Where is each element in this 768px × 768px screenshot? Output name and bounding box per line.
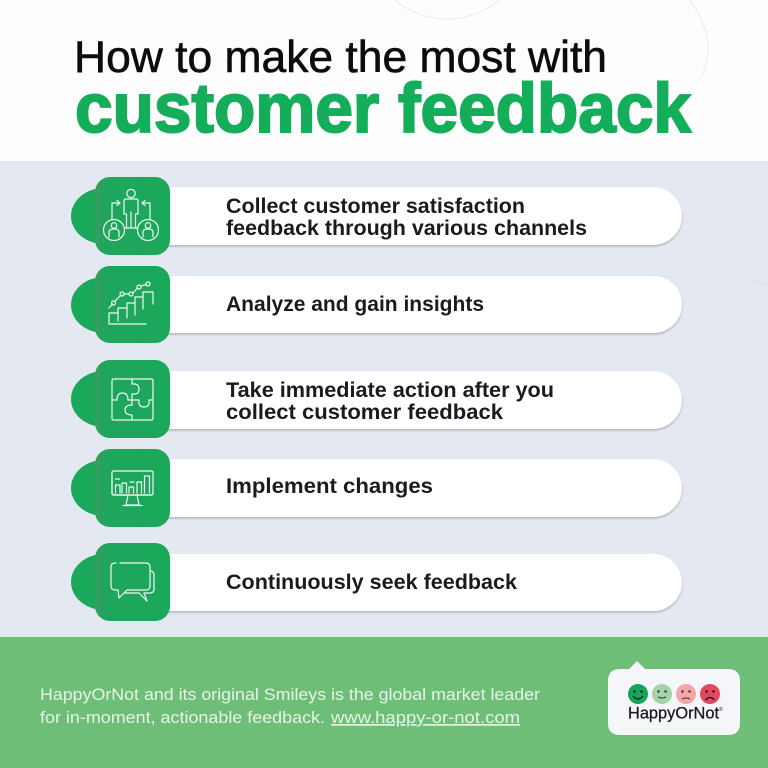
step 1 text: Collect customer satisfaction: [226, 194, 525, 218]
step 5 pill: [120, 554, 682, 611]
logo wordmark: HappyOrNot: [628, 704, 719, 722]
footer text: www.happy-or-not.com: [330, 708, 520, 727]
smiley: very unhappy: [700, 684, 720, 704]
step 2 pill: [120, 276, 682, 333]
footer text: HappyOrNot and its original Smileys is the global market leader: [40, 685, 540, 704]
step 3 icon badge: [71, 360, 170, 438]
logo: HappyOrNot speech bubble: [608, 661, 740, 735]
step 4 pill: [120, 459, 682, 517]
step 5 text: Continuously seek feedback: [226, 570, 517, 594]
step 3 text: Take immediate action after you: [226, 378, 554, 402]
step 5: seek feedback: [71, 543, 682, 621]
step 3: take action: [71, 360, 682, 438]
step 4: implement changes: [71, 449, 682, 527]
title: customer feedback: [75, 69, 691, 147]
step 1: collect feedback: [71, 177, 682, 255]
step 2: analyze: [71, 266, 682, 343]
footer text: for in-moment, actionable feedback.: [40, 708, 325, 727]
header background: [0, 0, 768, 161]
step 2 text: Analyze and gain insights: [226, 292, 484, 316]
step 1 pill: [120, 187, 682, 245]
body background: [0, 161, 768, 638]
step 1 text: feedback through various channels: [226, 216, 587, 240]
step 4 icon badge: [71, 449, 170, 527]
step 3 text: [226, 378, 554, 424]
step 4 text: Implement changes: [226, 474, 433, 498]
step 3 pill: [120, 371, 682, 429]
smiley: happy: [652, 684, 672, 704]
step 1 icon badge: [71, 177, 170, 255]
footer band: [0, 637, 768, 768]
step 2 icon badge: [71, 266, 170, 343]
footer text: [40, 685, 540, 727]
step 5 icon badge: [71, 543, 170, 621]
smiley: unhappy: [676, 684, 696, 704]
logo: HappyOrNot speech bubble: ®: [719, 706, 723, 713]
title: [74, 33, 691, 147]
smiley: very happy: [628, 684, 648, 704]
title: How to make the most with: [74, 33, 607, 82]
step 3 text: collect customer feedback: [226, 400, 503, 424]
step 1 text: [226, 194, 587, 240]
